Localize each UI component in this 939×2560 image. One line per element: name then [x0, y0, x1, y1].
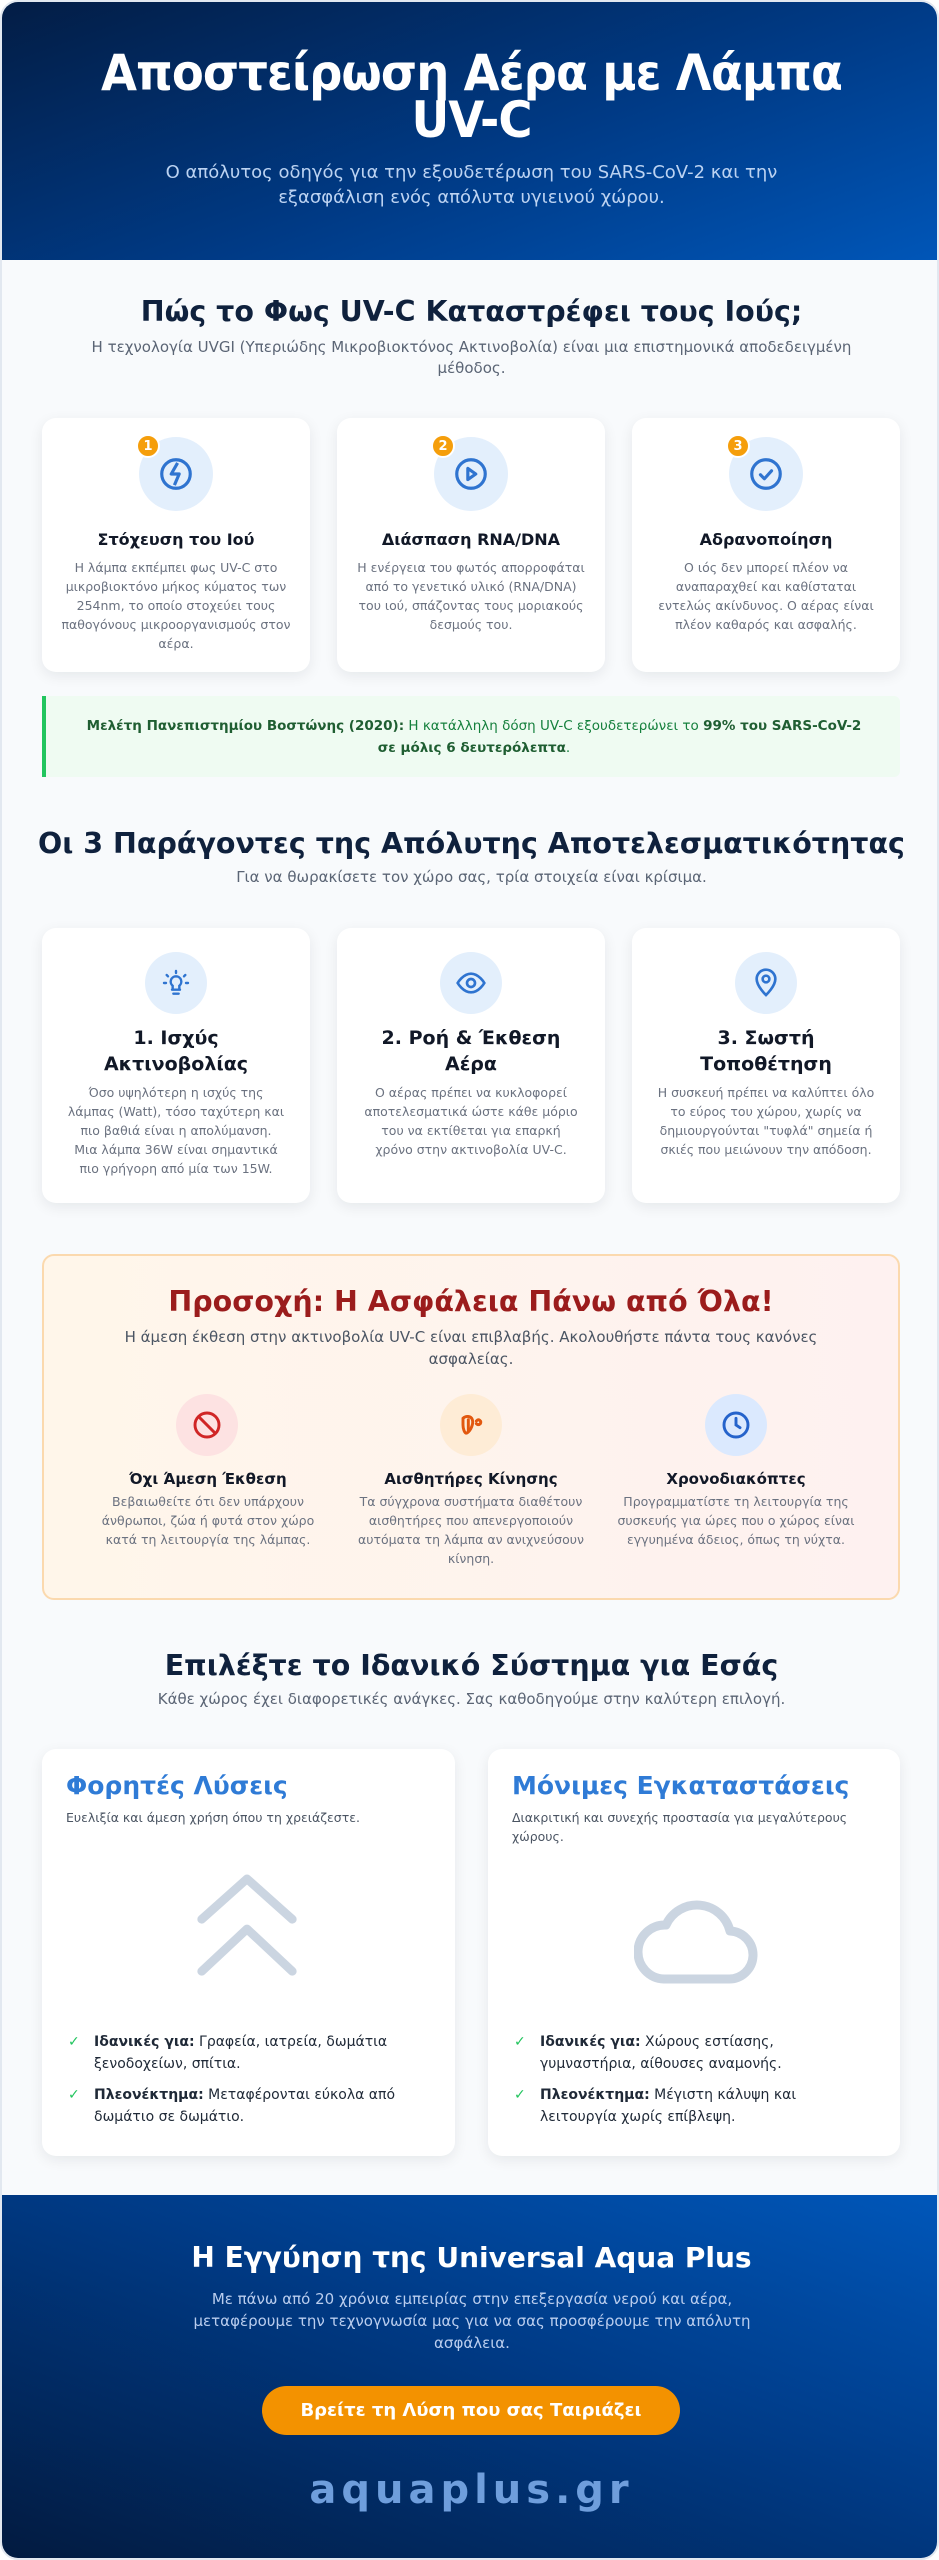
list: Ιδανικές για: Χώρους εστίασης, γυμναστήρια, αίθουσες αναμονής.: [540, 2034, 782, 2072]
item: timers: Χρονοδιακόπτες: [666, 1470, 806, 1488]
icon: target: [139, 437, 213, 511]
section subtitle: Η τεχνολογία UVGI (Υπεριώδης Μικροβιοκτόνος Ακτινοβολία) είναι μια επιστημονικά αποδεδειγμένη: [92, 338, 851, 356]
item: no direct exposure: Βεβαιωθείτε ότι δεν υπάρχουν άνθρωποι, ζώα ή φυτά στον χώρο κατά τη λειτουργία της λάμπας.: [102, 1494, 314, 1547]
icon: location pin: [735, 952, 797, 1014]
title: Μόνιμες Εγκαταστάσεις: [512, 1771, 849, 1800]
desc: [364, 1085, 578, 1157]
badge 2: [431, 434, 455, 458]
icon: eye: [440, 952, 502, 1014]
subtitle: Διακριτική και συνεχής προστασία για μεγαλύτερους χώρους.: [512, 1810, 847, 1844]
CTA button: [262, 2386, 680, 2435]
card: factor 3: [632, 928, 900, 1203]
desc: σκιές που μειώνουν την απόδοση.: [660, 1142, 872, 1157]
callout: Boston University study: σε μόλις 6 δευτερόλεπτα.: [378, 740, 570, 756]
item: motion sensors: Αισθητήρες Κίνησης: [384, 1470, 558, 1488]
title: [700, 1027, 832, 1075]
item: no direct exposure: [102, 1394, 314, 1547]
panel: safety warning: [42, 1254, 900, 1600]
icon: prohibited: [176, 1394, 238, 1456]
title: Στόχευση του Ιού: [98, 530, 254, 549]
badge 1: 1: [143, 438, 153, 454]
subtitle: Ο απόλυτος οδηγός για την εξουδετέρωση του SARS-CoV-2 και την: [166, 162, 777, 183]
desc: πιο βαθιά είναι η απολύμανση.: [80, 1123, 272, 1138]
item: motion sensors: Τα σύγχρονα συστήματα διαθέτουν αισθητήρες που απενεργοποιούν αυτόματα τη λάμπα αν ανιχνεύσουν κίνηση.: [358, 1494, 584, 1566]
item: motion sensors: [358, 1394, 584, 1566]
item: timers: [618, 1394, 854, 1547]
desc: Όσο υψηλότερη η ισχύς της: [89, 1085, 263, 1100]
safety heading: Προσοχή: Η Ασφάλεια Πάνω από Όλα!: [168, 1285, 774, 1318]
header banner: [2, 2, 939, 260]
desc: [68, 1085, 284, 1176]
subtitle: εξασφάλιση ενός απόλυτα υγιεινού χώρου.: [278, 187, 665, 208]
title: Φορητές Λύσεις: [66, 1771, 288, 1800]
card: step 1: [42, 418, 310, 672]
icon: play: [434, 437, 508, 511]
list: Ιδανικές για: Γραφεία, ιατρεία, δωμάτια ξενοδοχείων, σπίτια.: [94, 2034, 387, 2072]
title: 2. Ροή & Έκθεση: [382, 1027, 560, 1049]
desc: του να εκτίθεται για επαρκή: [381, 1123, 561, 1138]
desc: πιο γρήγορη από μία των 15W.: [79, 1161, 273, 1176]
desc: Η συσκευή πρέπει να καλύπτει όλο: [658, 1085, 874, 1100]
section heading: 3 factors: Οι 3 Παράγοντες της Απόλυτης Αποτελεσματικότητας: [38, 827, 905, 860]
footer title: Η Εγγύηση της Universal Aqua Plus: [191, 2241, 752, 2274]
section subtitle: [92, 338, 851, 377]
badge 1: [136, 434, 160, 458]
list: ✓: [514, 2087, 526, 2103]
title: [101, 44, 842, 149]
icon: sensor: [440, 1394, 502, 1456]
subtitle: Ευελιξία και άμεση χρήση όπου τη χρειάζεστε.: [66, 1810, 360, 1825]
item: timers: Προγραμματίστε τη λειτουργία της συσκευής για ώρες που ο χώρος είναι εγγυημένα άδειος, όπως τη νύχτα.: [618, 1494, 854, 1547]
card: step 2: [337, 418, 605, 672]
title: [104, 1027, 248, 1075]
badge 3: 3: [733, 438, 743, 454]
icon: cloud: [634, 1900, 758, 1984]
callout: Boston University study: Μελέτη Πανεπιστημίου Βοστώνης (2020): Η κατάλληλη δόση UV-C εξουδετερώνει το 99% του SARS-CoV-2: [87, 718, 861, 734]
badge 2: 2: [438, 438, 448, 454]
card: portable solutions: [42, 1749, 455, 2156]
desc: το εύρος του χώρου, χωρίς να: [670, 1104, 862, 1119]
title: Ακτινοβολίας: [104, 1053, 248, 1075]
title: [382, 1027, 560, 1075]
list: ✓: [68, 2034, 80, 2050]
safety subtitle: Η άμεση έκθεση στην ακτινοβολία UV-C είναι επιβλαβής. Ακολουθήστε πάντα τους κανόνες ασφαλείας.: [125, 1328, 817, 1368]
section heading: choose system: Επιλέξτε το Ιδανικό Σύστημα για Εσάς: [165, 1649, 778, 1682]
list: ✓: [68, 2087, 80, 2103]
title: UV-C: [411, 91, 532, 149]
card: permanent installations: [488, 1749, 900, 2156]
desc: λάμπας (Watt), τόσο ταχύτερη και: [68, 1104, 284, 1119]
desc: Ο ιός δεν μπορεί πλέον να αναπαραχθεί και καθίσταται εντελώς ακίνδυνος. Ο αέρας είναι πλέον καθαρός και ασφαλής.: [658, 560, 874, 632]
section subtitle: Για να θωρακίσετε τον χώρο σας, τρία στοιχεία είναι κρίσιμα.: [236, 868, 707, 886]
title: 1. Ισχύς: [133, 1027, 219, 1049]
title: 3. Σωστή: [718, 1027, 814, 1049]
card: factor 1: [42, 928, 310, 1203]
icon: clock: [705, 1394, 767, 1456]
desc: Ο αέρας πρέπει να κυκλοφορεί: [375, 1085, 567, 1100]
card: factor 2: [337, 928, 605, 1203]
badge 3: [726, 434, 750, 458]
subtitle: [166, 162, 777, 208]
list: ✓: [514, 2034, 526, 2050]
icon: bulb: [145, 952, 207, 1014]
section subtitle: μέθοδος.: [438, 359, 505, 377]
footer banner: [2, 2195, 939, 2560]
desc: χρόνο στην ακτινοβολία UV-C.: [375, 1142, 567, 1157]
desc: δημιουργούνται "τυφλά" σημεία ή: [660, 1123, 872, 1138]
title: Αέρα: [445, 1053, 497, 1075]
logo text: aquaplus.gr: [309, 2467, 634, 2513]
title: Αποστείρωση Αέρα με Λάμπα: [101, 44, 842, 102]
icon: chevrons up: [197, 1874, 297, 1976]
list: [68, 2034, 395, 2125]
desc: Η ενέργεια του φωτός απορροφάται από το γενετικό υλικό (RNA/DNA) του ιού, σπάζοντας τους μοριακούς δεσμούς του.: [357, 560, 585, 632]
section subtitle: Κάθε χώρος έχει διαφορετικές ανάγκες. Σας καθοδηγούμε στην καλύτερη επιλογή.: [158, 1690, 785, 1708]
section heading: how UV-C works: Πώς το Φως UV-C Καταστρέφει τους Ιούς;: [141, 295, 802, 328]
title: Τοποθέτηση: [700, 1053, 832, 1075]
desc: αποτελεσματικά ώστε κάθε μόριο: [364, 1104, 578, 1119]
list: Πλεονέκτημα: Μεταφέρονται εύκολα από δωμάτιο σε δωμάτιο.: [94, 2087, 395, 2125]
desc: [658, 1085, 874, 1157]
desc: Η λάμπα εκπέμπει φως UV-C στο μικροβιοκτόνο μήκος κύματος των 254nm, το οποίο στοχεύει τους παθογόνους μικροοργανισμούς στον αέρα.: [62, 560, 290, 651]
card: step 3: [632, 418, 900, 672]
list: Πλεονέκτημα: Μέγιστη κάλυψη και λειτουργία χωρίς επίβλεψη.: [540, 2087, 796, 2125]
icon: check: [729, 437, 803, 511]
title: Αδρανοποίηση: [700, 530, 832, 549]
callout: Boston University study: [42, 696, 900, 777]
title: Διάσπαση RNA/DNA: [382, 530, 560, 549]
footer text: Με πάνω από 20 χρόνια εμπειρίας στην επεξεργασία νερού και αέρα, μεταφέρουμε την τεχνογνωσία μας για να σας προσφέρουμε την απόλυτη ασφάλεια.: [194, 2290, 750, 2352]
list: [514, 2034, 796, 2125]
desc: Μια λάμπα 36W είναι σημαντικά: [74, 1142, 278, 1157]
CTA button: Βρείτε τη Λύση που σας Ταιριάζει: [300, 2400, 642, 2421]
item: no direct exposure: Όχι Άμεση Έκθεση: [129, 1470, 287, 1488]
